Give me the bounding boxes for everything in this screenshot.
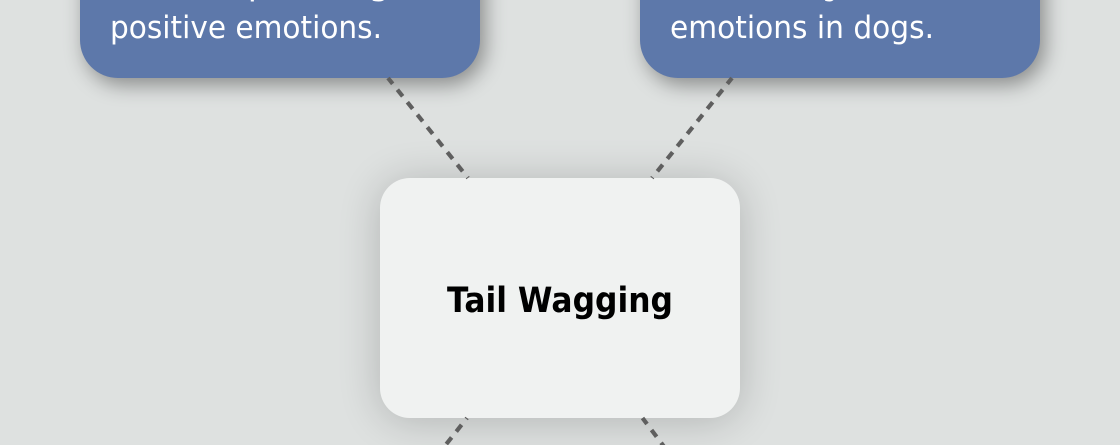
center node title: Tail Wagging [447, 281, 673, 321]
left callout text: positive emotions. [110, 10, 382, 46]
panel: left callout [80, 0, 480, 78]
panel: right callout [640, 0, 1040, 78]
right callout text: emotions in dogs. [670, 10, 934, 46]
panel: center node [380, 178, 740, 418]
